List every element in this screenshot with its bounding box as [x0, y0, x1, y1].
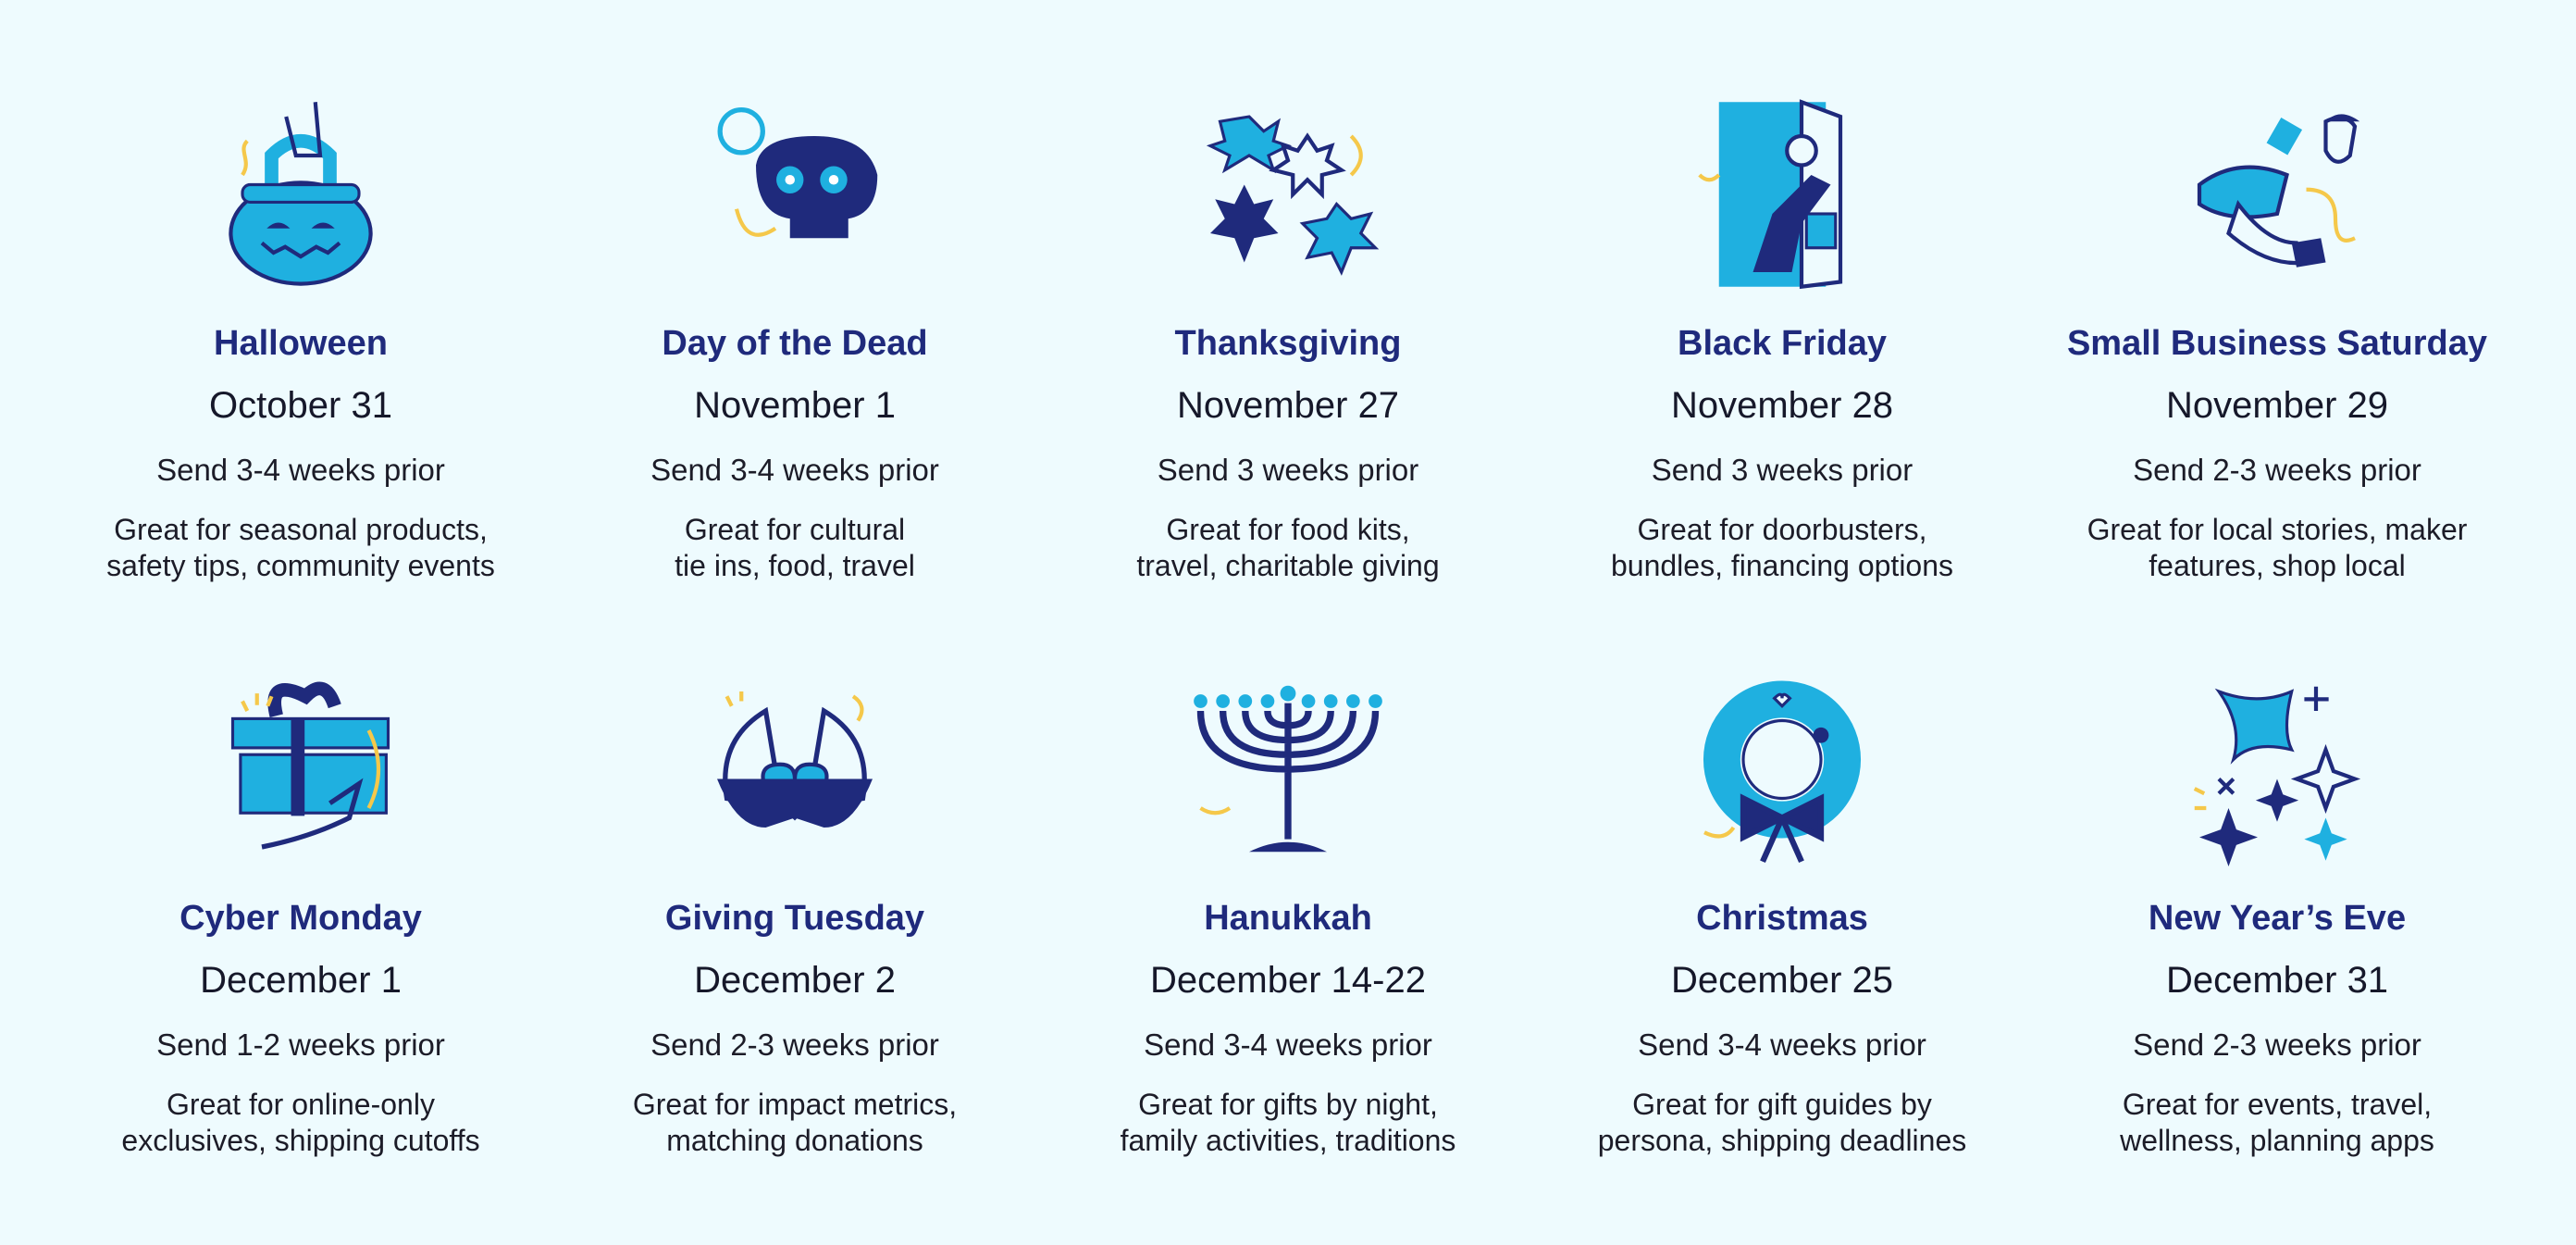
use cases: Great for gift guides by: [1632, 1088, 1932, 1121]
card: New Year's Eve: [2120, 687, 2434, 1157]
card: Cyber Monday: [121, 681, 480, 1157]
use cases: [121, 1088, 480, 1157]
use cases: family activities, traditions: [1121, 1124, 1455, 1157]
title: Small Business Saturday: [2067, 324, 2487, 363]
use cases: Great for gifts by night,: [1138, 1088, 1438, 1121]
use cases: Great for online-only: [167, 1088, 435, 1121]
use cases: tie ins, food, travel: [675, 549, 915, 582]
card: Christmas: [1598, 681, 1966, 1157]
card: Hanukkah: [1121, 685, 1455, 1157]
icon: menorah: [1194, 685, 1382, 852]
title: Black Friday: [1678, 324, 1887, 363]
icon: pumpkin basket: [229, 102, 373, 286]
send timing: Send 2-3 weeks prior: [650, 1027, 939, 1062]
title: Hanukkah: [1204, 899, 1372, 938]
title: New Year’s Eve: [2149, 899, 2406, 938]
card: Giving Tuesday: [633, 691, 957, 1157]
use cases: [675, 513, 915, 582]
use cases: [633, 1088, 957, 1157]
title: Giving Tuesday: [665, 899, 924, 938]
date: November 27: [1177, 385, 1399, 426]
use cases: bundles, financing options: [1611, 549, 1953, 582]
use cases: matching donations: [666, 1124, 923, 1157]
use cases: travel, charitable giving: [1136, 549, 1440, 582]
use cases: Great for doorbusters,: [1637, 513, 1927, 546]
use cases: safety tips, community events: [106, 549, 495, 582]
card: Thanksgiving: [1136, 115, 1440, 582]
date: December 1: [200, 960, 402, 1001]
date: November 1: [694, 385, 896, 426]
icon: wreath: [1703, 681, 1862, 863]
use cases: [1121, 1088, 1455, 1157]
use cases: exclusives, shipping cutoffs: [121, 1124, 480, 1157]
use cases: wellness, planning apps: [2120, 1124, 2434, 1157]
card: Halloween: [106, 102, 495, 582]
use cases: Great for food kits,: [1166, 513, 1410, 546]
use cases: Great for cultural: [685, 513, 905, 546]
send timing: Send 3-4 weeks prior: [1144, 1027, 1432, 1062]
date: November 28: [1671, 385, 1893, 426]
icon: sparkles: [2193, 687, 2360, 866]
card: Day of the Dead: [650, 107, 939, 582]
date: December 31: [2166, 960, 2388, 1001]
icon: leaves: [1207, 115, 1379, 276]
send timing: Send 3 weeks prior: [1158, 453, 1418, 487]
title: Day of the Dead: [662, 324, 928, 363]
use cases: persona, shipping deadlines: [1598, 1124, 1966, 1157]
send timing: Send 3-4 weeks prior: [1638, 1027, 1926, 1062]
card: Black Friday: [1611, 99, 1953, 582]
use cases: [106, 513, 495, 582]
date: December 25: [1671, 960, 1893, 1001]
title: Cyber Monday: [180, 899, 422, 938]
title: Christmas: [1696, 899, 1868, 938]
use cases: features, shop local: [2149, 549, 2406, 582]
icon: hands and tag: [2197, 114, 2359, 268]
icon: heart hands: [717, 691, 873, 828]
use cases: Great for events, travel,: [2123, 1088, 2432, 1121]
send timing: Send 3-4 weeks prior: [650, 453, 939, 487]
icon: shopper at door: [1698, 99, 1843, 289]
icon: sugar skull: [718, 107, 877, 239]
title: Thanksgiving: [1175, 324, 1401, 363]
date: December 14-22: [1150, 960, 1426, 1001]
use cases: [1611, 513, 1953, 582]
send timing: Send 3 weeks prior: [1652, 453, 1913, 487]
icon: gift box: [231, 681, 390, 850]
title: Halloween: [214, 324, 388, 363]
use cases: [2087, 513, 2467, 582]
use cases: Great for local stories, maker: [2087, 513, 2467, 546]
date: November 29: [2166, 385, 2388, 426]
date: December 2: [694, 960, 896, 1001]
use cases: [2120, 1088, 2434, 1157]
send timing: Send 3-4 weeks prior: [156, 453, 445, 487]
use cases: Great for impact metrics,: [633, 1088, 957, 1121]
send timing: Send 1-2 weeks prior: [156, 1027, 445, 1062]
use cases: [1598, 1088, 1966, 1157]
send timing: Send 2-3 weeks prior: [2133, 453, 2421, 487]
date: October 31: [209, 385, 392, 426]
use cases: Great for seasonal products,: [114, 513, 488, 546]
use cases: [1136, 513, 1440, 582]
send timing: Send 2-3 weeks prior: [2133, 1027, 2421, 1062]
card: Small Business Saturday: [2067, 114, 2487, 582]
